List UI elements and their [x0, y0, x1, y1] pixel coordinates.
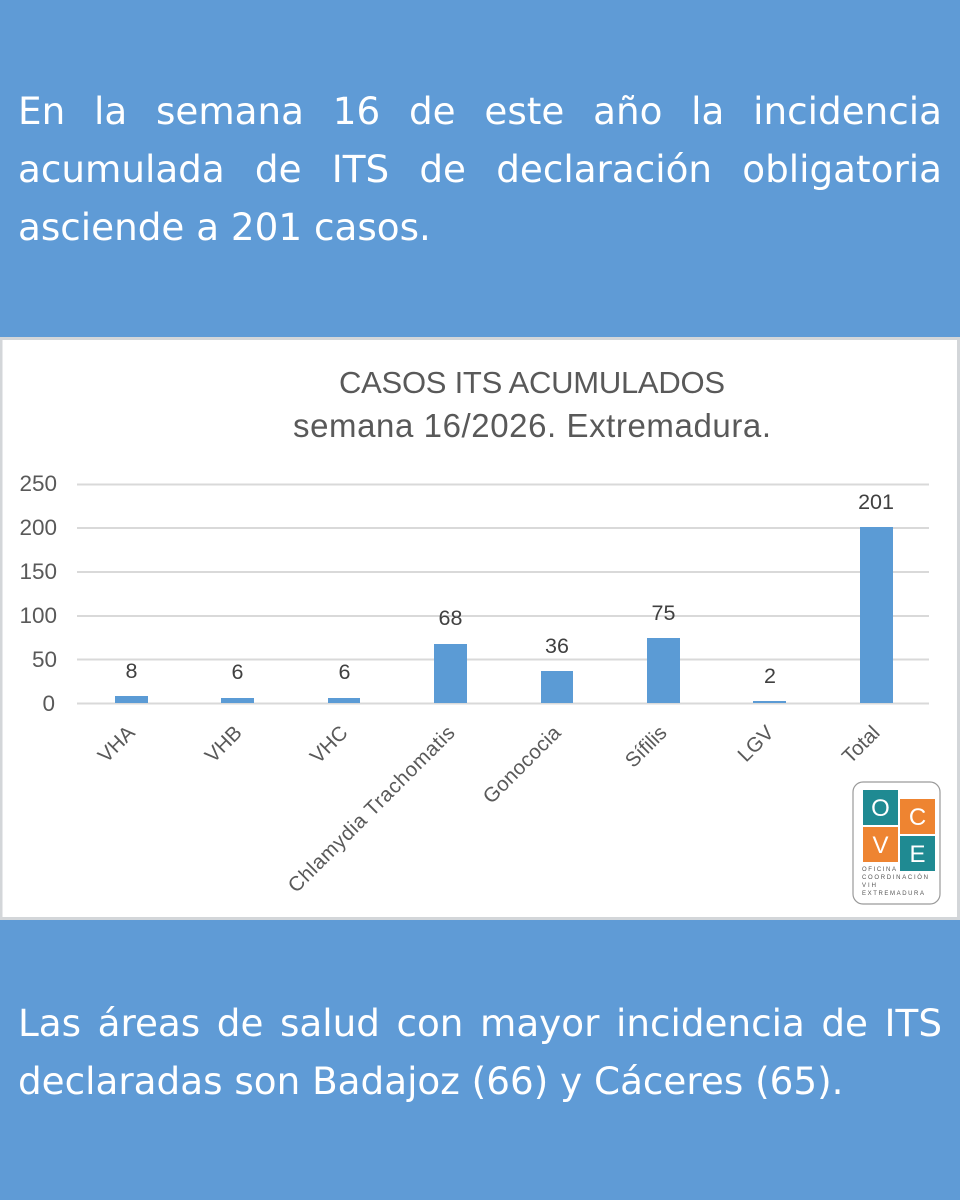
category labels: Total [838, 721, 885, 768]
logo: OCVE: OFICINA [862, 867, 896, 873]
top text block: En la semana 16 de este año la incidencia [18, 89, 942, 133]
logo: OCVE: O [871, 795, 890, 822]
data labels: 201 [858, 490, 894, 514]
y axis labels: 250 [19, 471, 57, 496]
bottom text block: declaradas son Badajoz (66) y Cáceres (65). [18, 1059, 844, 1103]
top text block: asciende a 201 casos. [18, 205, 431, 249]
chart title: CASOS ITS ACUMULADOS [339, 365, 725, 400]
logo: OCVE: E [909, 841, 926, 868]
y axis labels: 100 [19, 603, 57, 628]
category labels: VHC [306, 721, 353, 768]
y axis labels: 50 [32, 647, 57, 672]
data labels [126, 490, 894, 688]
category labels: Sífilis [621, 721, 672, 772]
logo: OCVE: EXTREMADURA [862, 891, 924, 897]
data labels: 2 [764, 664, 776, 688]
bars [115, 527, 893, 703]
bottom text block: Las áreas de salud con mayor incidencia de ITS [18, 1001, 942, 1045]
category labels: VHA [93, 721, 140, 767]
bar chart [19, 471, 929, 897]
category labels: LGV [733, 721, 779, 767]
data labels: 8 [126, 659, 138, 683]
panel: chart [0, 337, 960, 920]
y axis labels: 150 [19, 559, 57, 584]
category labels [93, 721, 885, 897]
top text block [18, 89, 942, 249]
top text block: acumulada de ITS de declaración obligatoria [18, 147, 942, 191]
data labels: 75 [652, 601, 675, 625]
category labels: VHB [200, 721, 247, 767]
logo: OCVE: COORDINACIÓN [862, 874, 928, 881]
data labels: 36 [545, 634, 569, 658]
chart title [293, 365, 771, 444]
y axis labels: 0 [42, 691, 55, 716]
category labels: Chlamydia Trachomatis [283, 721, 460, 897]
chart title: semana 16/2026. Extremadura. [293, 407, 771, 444]
logo: OCVE: C [909, 804, 926, 831]
data labels: 68 [439, 606, 462, 630]
logo: OCVE: VIH [862, 883, 876, 889]
category labels: Gonococia [479, 721, 566, 808]
bottom text block [18, 1001, 942, 1103]
logo: OCVE [853, 782, 940, 904]
logo: OCVE: V [872, 832, 889, 859]
y axis labels [19, 471, 57, 716]
data labels: 6 [339, 660, 351, 684]
y axis labels: 200 [19, 515, 57, 540]
data labels: 6 [232, 660, 244, 684]
